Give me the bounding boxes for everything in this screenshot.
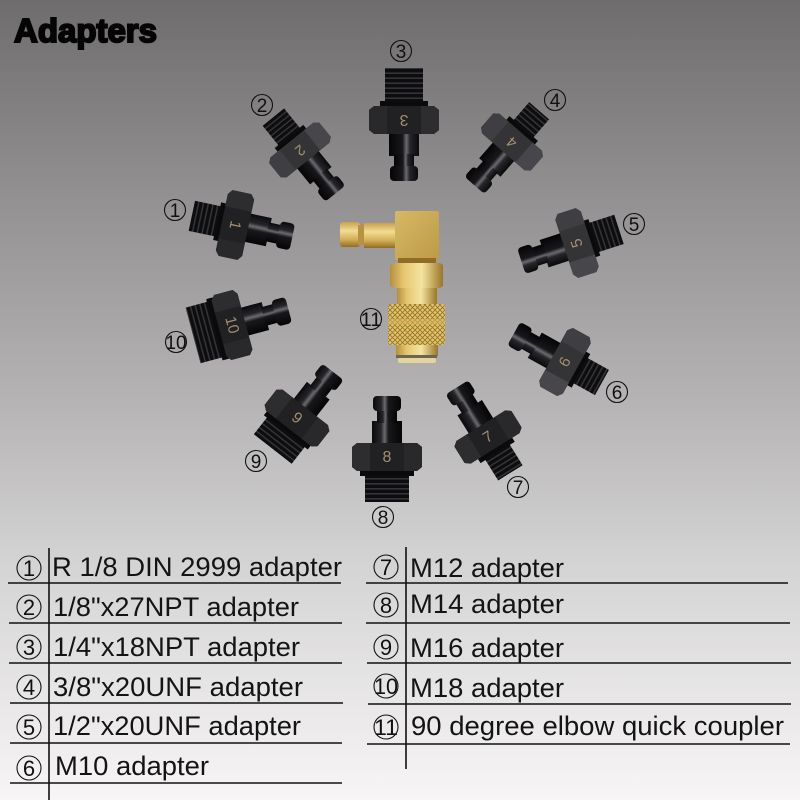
adapter 2: 2 [291,141,308,158]
callout numbers on photo: 8 [378,508,388,529]
table: left column: 1 [23,556,35,581]
table: left column [8,548,343,800]
callout numbers on photo: 10 [166,333,186,354]
adapter 3 [369,68,439,181]
adapter 8: 8 [383,449,392,466]
callout numbers on photo: 5 [629,215,639,236]
table: right column: M16 adapter [410,633,564,663]
title: Adapters [14,12,157,49]
adapter 6 [497,304,618,412]
callout numbers on photo: 4 [550,91,561,112]
adapter 10: 10 [221,315,242,336]
table: left column: 3 [23,635,35,660]
callout numbers on photo: 9 [251,452,261,473]
callout numbers on photo: 7 [513,478,523,499]
adapter 7 [428,370,539,491]
adapter 5: 5 [568,236,587,250]
adapter 9: 9 [288,409,305,428]
callout numbers on photo: 2 [257,96,267,117]
adapter 11: brass elbow quick coupler [340,211,445,363]
table: left column: 6 [23,756,35,781]
table: left column: 3/8"x20UNF adapter [53,672,303,702]
adapter 3: 3 [399,111,408,128]
table: left column: M10 adapter [55,751,209,781]
adapter 1 [185,183,299,270]
table: left column: 1/8"x27NPT adapter [53,592,299,622]
table: right column: M14 adapter [410,589,564,619]
table: right column [366,547,791,769]
adapter 7: 7 [480,428,496,447]
table: left column: 2 [23,595,35,620]
table: left column: 4 [23,675,35,700]
table: right column: 9 [380,635,392,660]
table: left column: R 1/8 DIN 2999 adapter [52,552,342,582]
adapter 6: 6 [556,354,575,370]
adapter 1: 1 [226,219,244,231]
adapter 9 [246,351,360,470]
adapter 5 [511,197,629,293]
table: right column: M12 adapter [410,553,564,583]
table: left column: 1/4"x18NPT adapter [53,632,300,662]
table: right column: 7 [380,555,392,580]
table: right column: M18 adapter [410,673,564,703]
table: right column: 8 [380,593,392,618]
table: right column: 10 [374,674,398,699]
table: left column: 1/2"x20UNF adapter [53,711,301,741]
table: left column: 5 [23,715,35,740]
callout numbers on photo [164,40,644,529]
callout numbers on photo: 6 [612,383,622,404]
callout numbers on photo: 3 [396,42,406,63]
table: right column: 90 degree elbow quick coupler [411,711,784,741]
adapter 10 [184,277,297,368]
adapter 8 [352,396,422,502]
adapter 2 [248,97,360,214]
adapter 4 [450,89,564,207]
callout numbers on photo: 11 [360,310,382,331]
adapter 4: 4 [503,133,521,151]
callout numbers on photo: 1 [170,201,180,222]
table: right column: 11 [374,715,398,740]
